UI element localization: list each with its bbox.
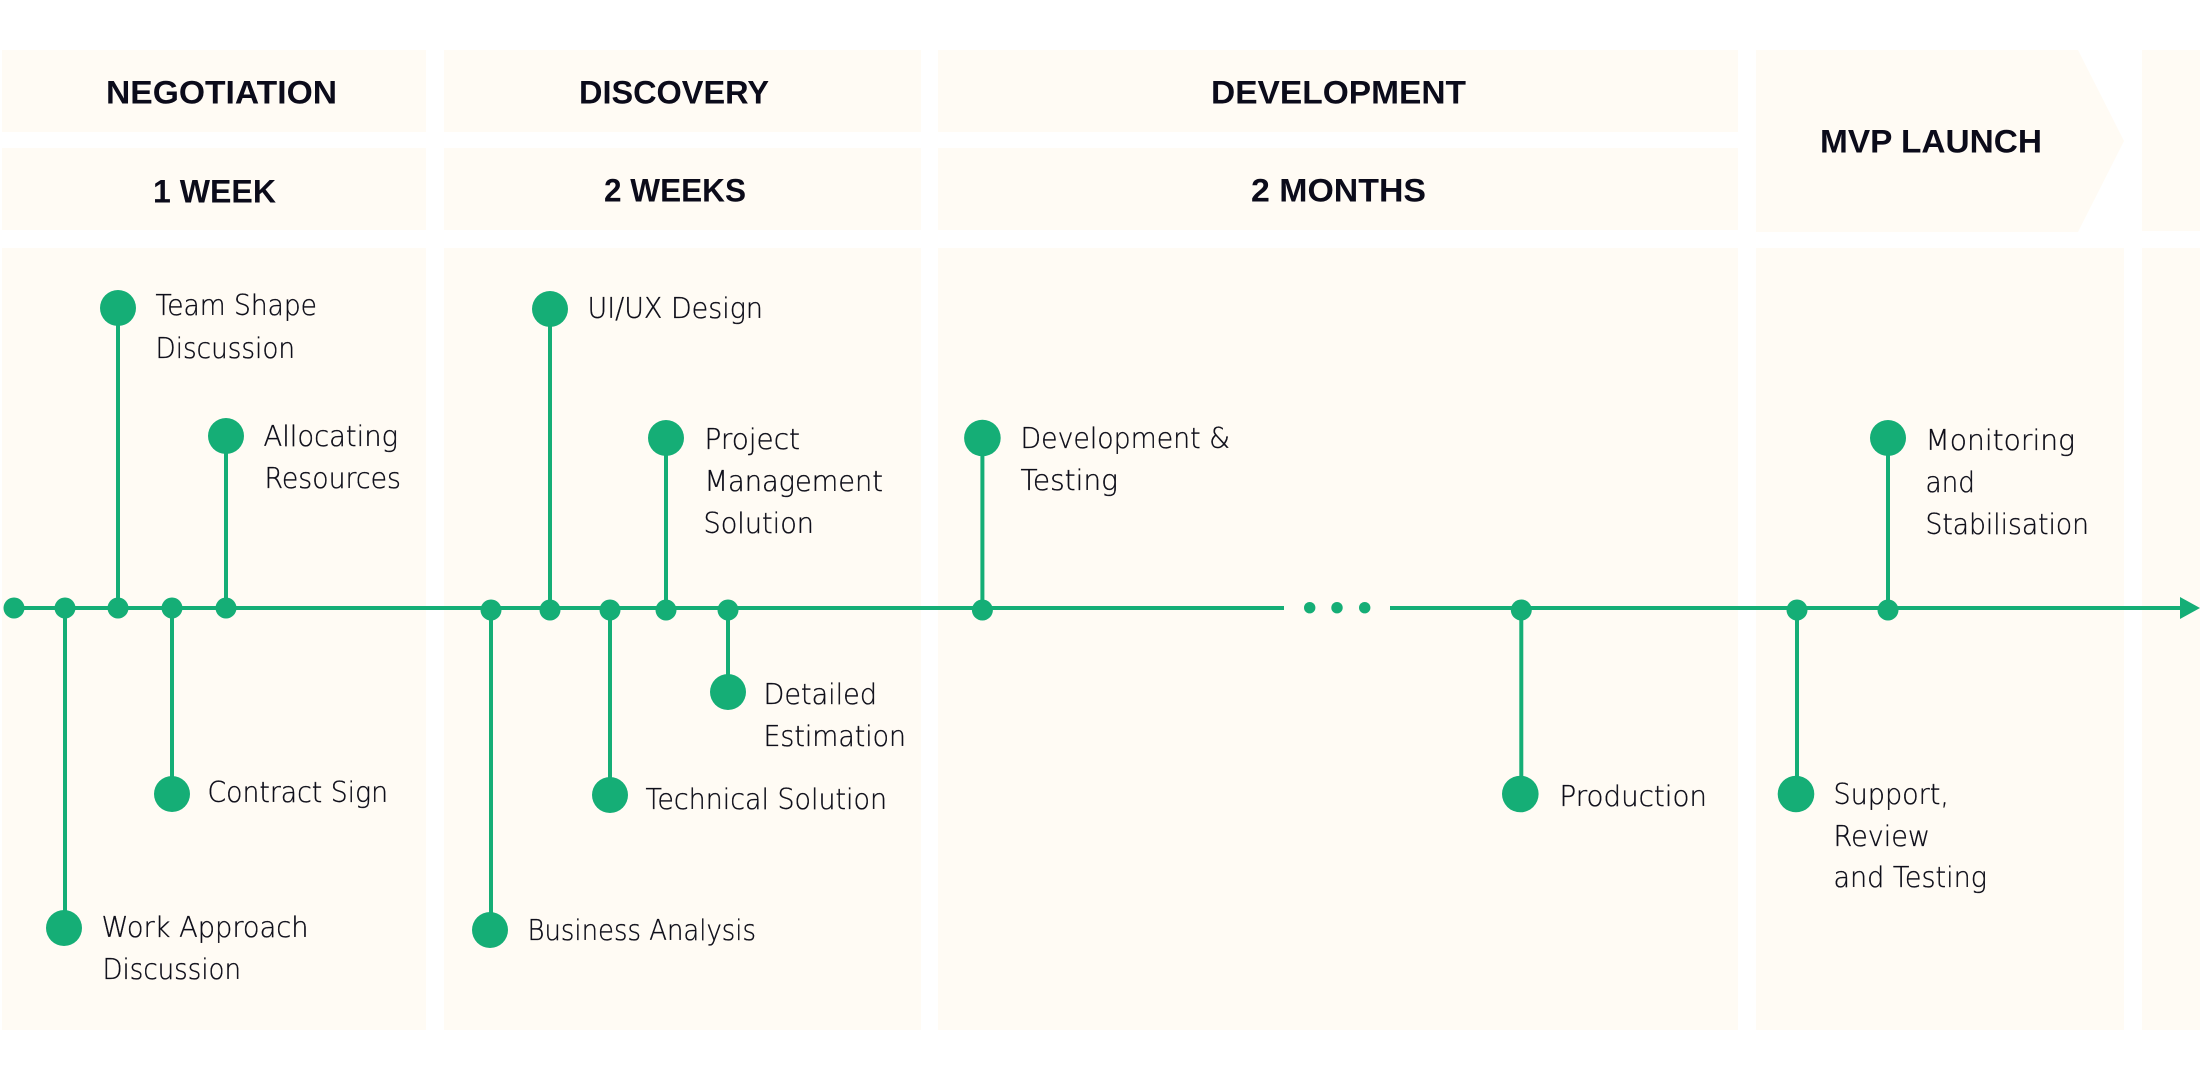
milestone: Project Management Solution (648, 420, 883, 620)
milestone: Technical Solution: Technical Solution (646, 783, 887, 816)
duration: 1 WEEK: 1 WEEK (153, 174, 276, 210)
panel: discovery column (444, 50, 921, 1030)
milestone: UI/UX Design: UI/UX Design (588, 292, 763, 325)
duration: 2 WEEKS (444, 148, 921, 230)
milestone: Monitoring and Stabilisation (1870, 420, 2089, 620)
milestone: Technical Solution (592, 600, 887, 816)
milestone: UI/UX Design (532, 291, 763, 620)
milestone: Monitoring and Stabilisation: Stabilisation (1926, 508, 2089, 541)
milestone: Business Analysis (472, 600, 756, 948)
panel: next stage column, cropped (2142, 50, 2200, 1030)
panel: negotiation column (2, 50, 426, 1030)
milestone: Project Management Solution: Project (704, 423, 800, 456)
milestone: Detailed Estimation: Detailed (764, 678, 877, 711)
milestone: Support, Review and Testing: Support, (1834, 778, 1949, 811)
panel body: negotiation (2, 248, 426, 1030)
milestone: Work Approach Discussion: Discussion (102, 953, 241, 986)
milestone: Project Management Solution: Management (704, 465, 883, 498)
milestone: Monitoring and Stabilisation: Monitoring (1926, 424, 2075, 457)
ellipsis: gap in timeline (1304, 602, 1370, 613)
milestone: Work Approach Discussion (46, 598, 308, 986)
duration: 1 WEEK (2, 148, 426, 230)
milestone: Team Shape Discussion: Team Shape (156, 289, 317, 322)
panel: MVP launch column (1756, 50, 2124, 1030)
panel body: development (938, 248, 1738, 1030)
duration: 2 MONTHS: 2 MONTHS (1251, 172, 1426, 208)
milestone: Support, Review and Testing: and Testing (1834, 861, 1987, 894)
arrow: main timeline (4, 597, 2200, 619)
milestone: Support, Review and Testing (1778, 600, 1987, 894)
milestone: Allocating Resources: Allocating (264, 420, 398, 453)
panel: development column (938, 50, 1738, 1030)
duration: 2 MONTHS (938, 148, 1738, 230)
milestone: Contract Sign (154, 598, 388, 812)
milestone: Development & Testing: Development & (1020, 422, 1230, 455)
milestone: Production: Production (1560, 780, 1707, 813)
milestone: Production (1502, 600, 1707, 813)
milestone: Team Shape Discussion: Discussion (156, 332, 295, 365)
milestone: Allocating Resources (208, 418, 401, 618)
milestone: Contract Sign: Contract Sign (208, 776, 388, 809)
heading: DEVELOPMENT: DEVELOPMENT (1211, 74, 1466, 110)
heading: DISCOVERY: DISCOVERY (579, 74, 769, 110)
heading: DEVELOPMENT (938, 50, 1738, 132)
milestone: Allocating Resources: Resources (264, 462, 401, 495)
milestone: Business Analysis: Business Analysis (528, 914, 756, 947)
heading: DISCOVERY (444, 50, 921, 132)
milestone: Team Shape Discussion (100, 289, 317, 618)
duration: 2 WEEKS: 2 WEEKS (604, 172, 746, 208)
milestone: Monitoring and Stabilisation: and (1926, 466, 1975, 499)
milestone: Development & Testing (964, 420, 1230, 620)
milestone: Development & Testing: Testing (1020, 464, 1118, 497)
milestone: Work Approach Discussion: Work Approach (102, 911, 308, 944)
milestone: Detailed Estimation (710, 600, 906, 753)
heading: MVP LAUNCH arrow banner (1756, 50, 2124, 232)
milestone: Detailed Estimation: Estimation (764, 720, 906, 753)
panel body: discovery (444, 248, 921, 1030)
heading: MVP LAUNCH arrow banner: MVP LAUNCH (1820, 124, 2042, 160)
milestone: Support, Review and Testing: Review (1834, 820, 1930, 853)
heading: NEGOTIATION: NEGOTIATION (106, 74, 337, 110)
panel body: MVP launch (1756, 248, 2124, 1030)
milestone: Project Management Solution: Solution (704, 507, 814, 540)
heading: NEGOTIATION (2, 50, 426, 132)
